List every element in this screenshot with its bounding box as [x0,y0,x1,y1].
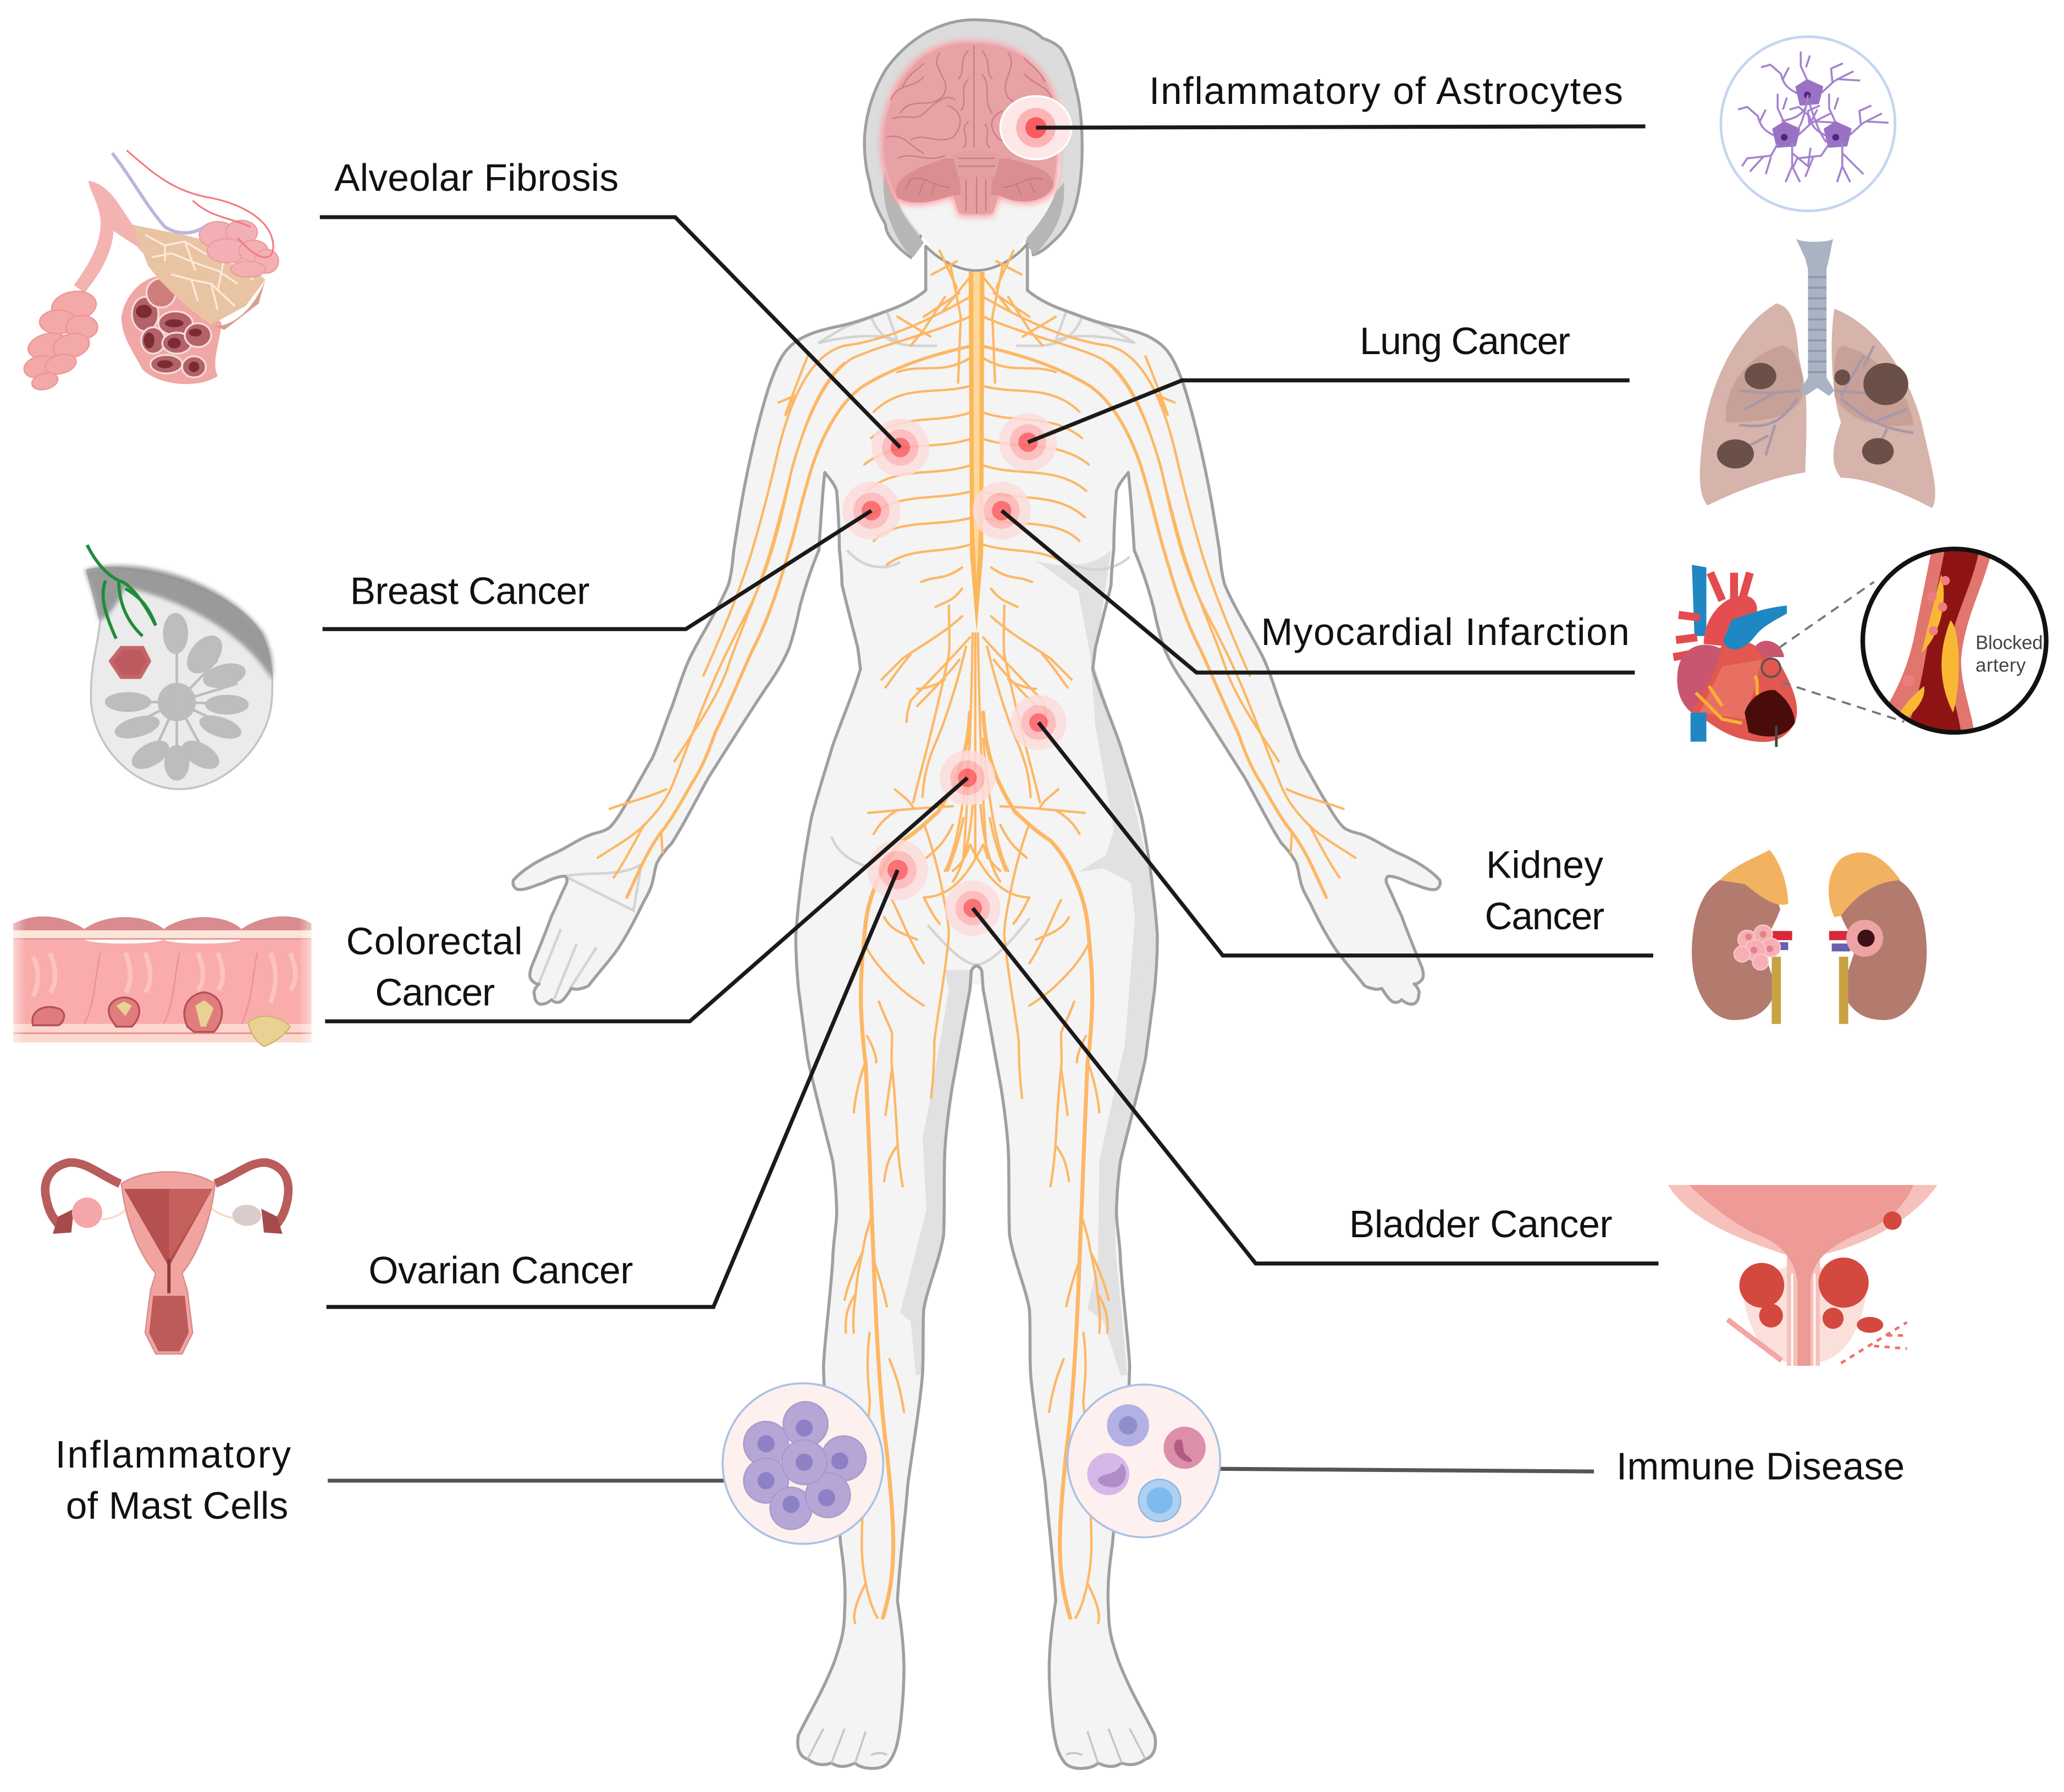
icon: kidneys with tumors [1692,850,1927,1024]
icon: immune cells [1068,1385,1220,1537]
icon: colorectal tumor progression [0,908,324,1047]
leader lines [320,126,1658,1481]
label: Colorectal Cancer [346,919,522,1014]
cauda equina [945,633,1008,881]
toes [808,1729,1145,1763]
label: Lung Cancer: Lung Cancer [1360,319,1570,362]
left side thigh and leg shading [900,970,970,1375]
label: Myocardial Infarction: Myocardial Infarction [1261,610,1630,653]
icon: lungs with tumors [1700,239,1935,508]
label: Bladder Cancer: Bladder Cancer [1349,1203,1613,1245]
label: Inflammatory of Mast Cells: of Mast Cells [66,1484,288,1527]
icon: uterus and ovaries [45,1162,288,1354]
label: Immune Disease: Immune Disease [1616,1444,1905,1487]
label: Kidney Cancer [1484,843,1604,938]
label: Colorectal Cancer: Cancer [375,971,495,1014]
right side body shading [1036,550,1157,1099]
spinal cord [969,272,985,632]
label: Colorectal Cancer: Colorectal [346,919,522,962]
icon: bladder and prostate cancer [1668,1185,1938,1366]
brain [881,41,1059,217]
alveolar sac [21,288,98,393]
hair [864,20,1082,257]
label: Inflammatory of Mast Cells: Inflammatory [56,1433,291,1476]
label: Ovarian Cancer: Ovarian Cancer [368,1249,633,1292]
nervous system [598,251,1355,1623]
icon: mast cells [722,1383,883,1544]
label: blocked artery: Blocked [1975,632,2043,654]
shoulder, chest and hip creases [538,311,1135,999]
label: Kidney Cancer: Cancer [1484,895,1604,938]
healthy alveoli [199,220,278,277]
icon: breast cancer [85,545,273,789]
diseased alveoli [132,278,211,377]
face [887,45,1061,271]
hotspot: brain [1000,96,1072,159]
label: Inflammatory of Mast Cells [56,1433,291,1527]
label: Alveolar Fibrosis: Alveolar Fibrosis [334,156,619,199]
body outline left [513,245,976,1768]
disease labels [56,69,1905,1527]
label: Kidney Cancer: Kidney [1486,843,1603,886]
label: Breast Cancer: Breast Cancer [350,570,590,613]
body outline right [976,245,1440,1768]
label: Inflammatory of Astrocytes: Inflammatory of Astrocytes [1149,69,1623,112]
side hair flaps [884,172,1064,257]
inflammation hotspots [842,413,1066,936]
label: blocked artery [1975,632,2043,676]
label: blocked artery: artery [1975,655,2026,676]
right leg shading [1088,953,1157,1375]
icon: astrocytes [1721,37,1895,211]
human body figure [513,20,1440,1768]
icon: heart with infarct [1674,565,1797,747]
icon: alveoli with fibrosis [21,151,278,393]
icon: magnified blocked artery [1779,548,2046,732]
brain folds [887,45,1052,214]
